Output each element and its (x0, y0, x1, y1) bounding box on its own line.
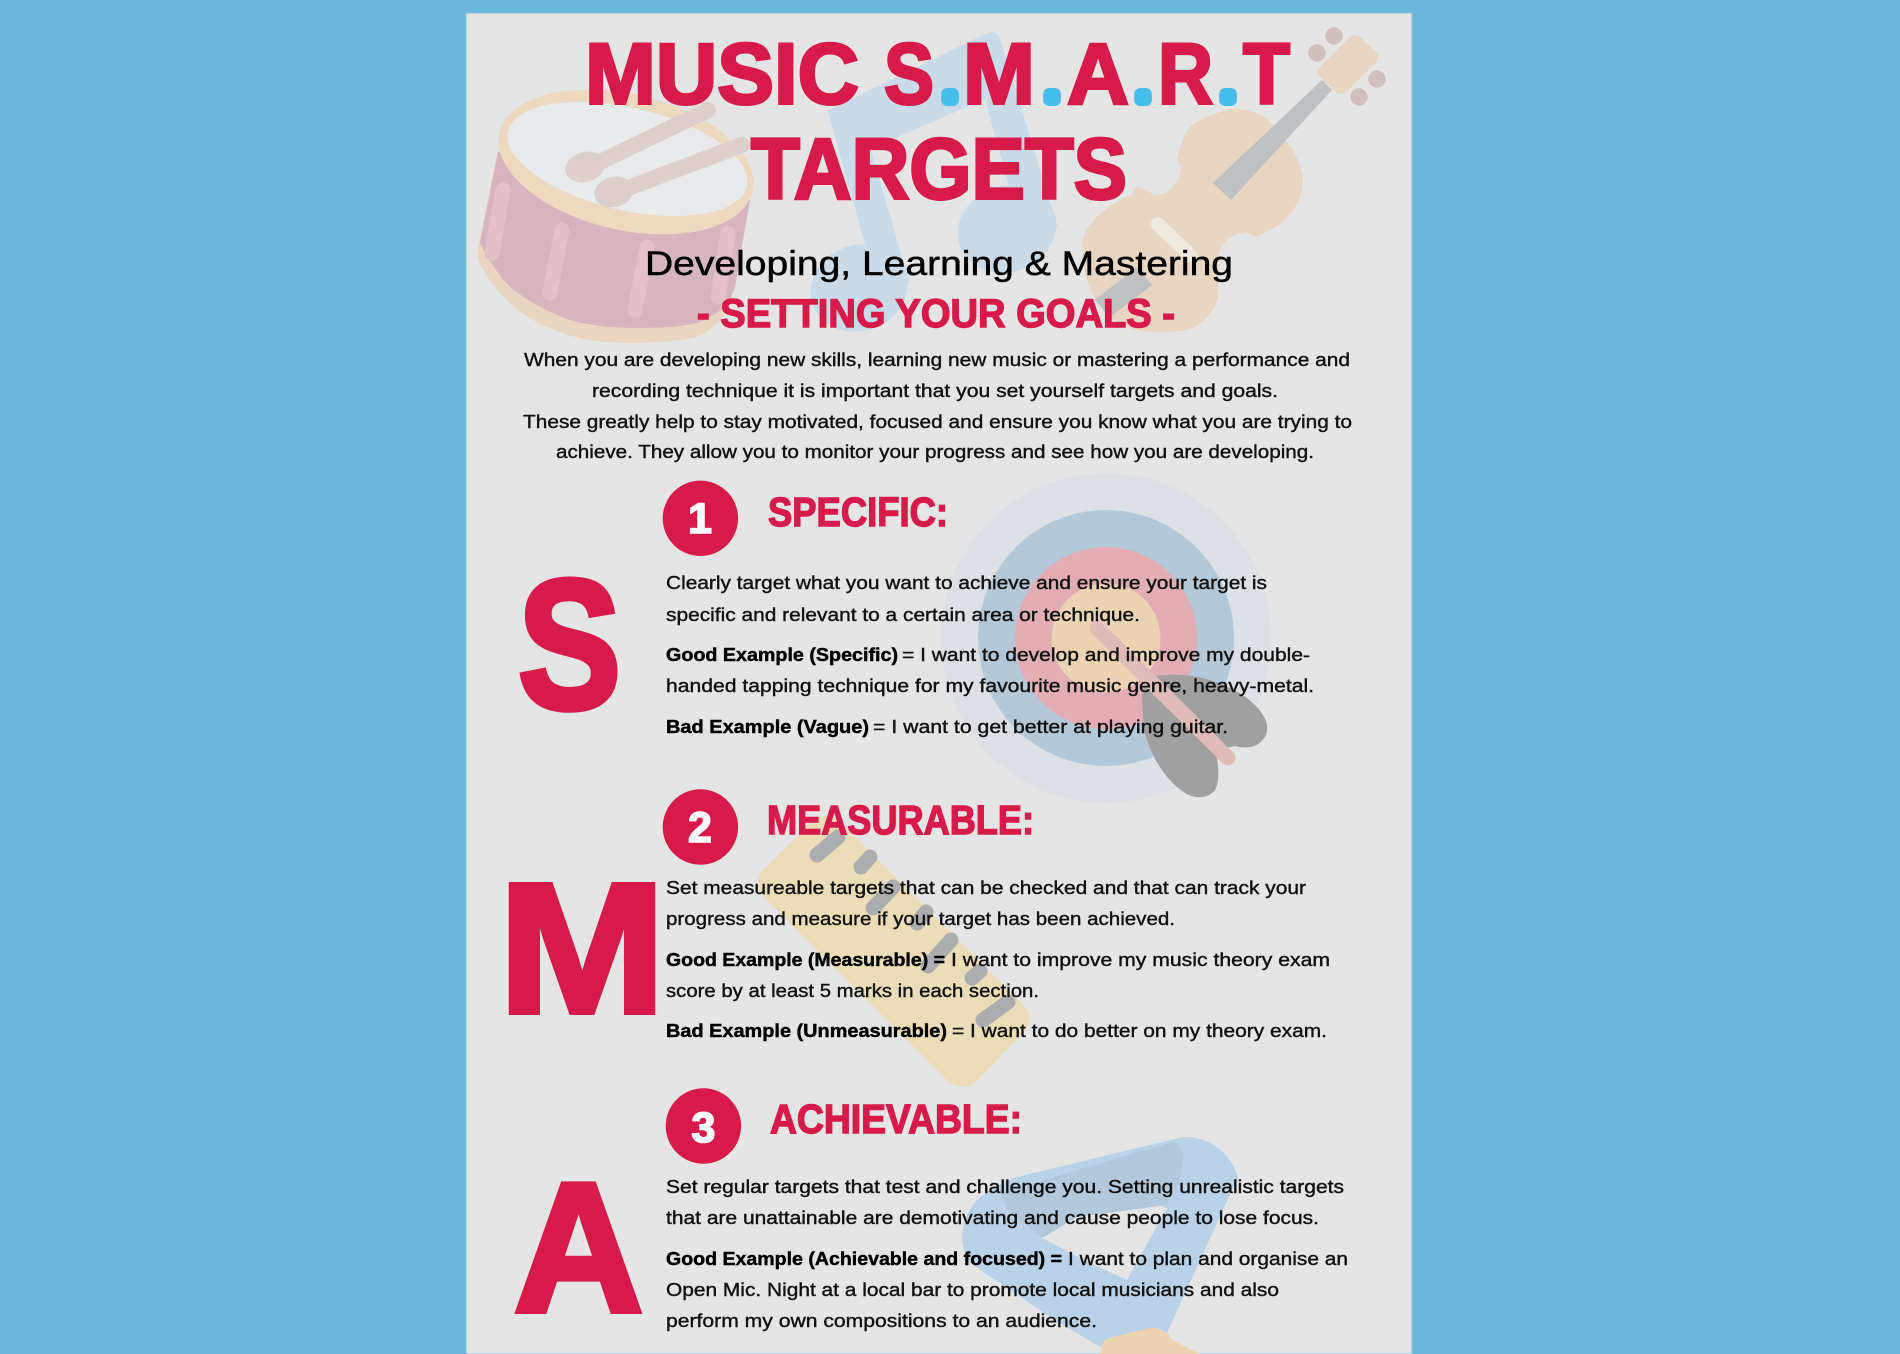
badge 1: 1 (688, 495, 712, 543)
title line 1: A (1067, 26, 1129, 122)
heading: measurable: MEASURABLE: (767, 797, 1034, 843)
icon: target with dart (941, 473, 1271, 803)
body text: = I want to develop and improve my double- (902, 644, 1310, 665)
body text: handed tapping technique for my favourite music genre, heavy-metal. (666, 675, 1314, 696)
intro paragraph: recording technique it is important that you set yourself targets and goals. (592, 380, 1278, 401)
body text: Bad Example (Unmeasurable) (666, 1020, 947, 1041)
body text: progress and measure if your target has been achieved. (666, 908, 1175, 929)
body text: specific and relevant to a certain area or technique. (666, 604, 1140, 625)
title line 1: M (963, 26, 1035, 122)
body text: Good Example (Achievable and focused) = (666, 1248, 1062, 1269)
body text: that are unattainable are demotivating and cause people to lose focus. (666, 1207, 1319, 1228)
badge 3: 3 (691, 1104, 715, 1152)
badge 2 (663, 789, 738, 865)
body text: Bad Example (Vague) (666, 716, 869, 737)
title line 1: . (1222, 65, 1234, 109)
body text: = I want to get better at playing guitar. (873, 716, 1228, 737)
body text (666, 572, 1314, 737)
subtitle: Developing, Learning & Mastering (645, 245, 1233, 283)
body text: Clearly target what you want to achieve and ensure your target is (666, 572, 1267, 593)
body text: perform my own compositions to an audience. (666, 1310, 1097, 1331)
badge 3 (666, 1088, 741, 1164)
title line 1: R (1158, 26, 1213, 122)
title line 1 (585, 26, 1290, 122)
title line 1: . (1138, 65, 1149, 109)
title (585, 26, 1290, 218)
body text: Good Example (Measurable) = (666, 949, 945, 970)
body text: Set measureable targets that can be checked and that can track your (666, 877, 1306, 898)
badge 1 (663, 481, 738, 556)
body text (666, 877, 1330, 1041)
intro paragraph: These greatly help to stay motivated, focused and ensure you know what you are trying to (523, 411, 1352, 432)
title line 1: T (1243, 26, 1290, 122)
section: measurable (498, 789, 1330, 1052)
letter S: S (518, 541, 621, 747)
badge 2: 2 (688, 804, 712, 852)
heading: specific: SPECIFIC: (768, 489, 948, 535)
title line 2: TARGETS (751, 122, 1127, 218)
intro paragraph: achieve. They allow you to monitor your progress and see how you are developing. (556, 441, 1314, 462)
title line 1: . (944, 65, 956, 109)
body text: I want to plan and organise an (1068, 1248, 1348, 1269)
body text: score by at least 5 marks in each section. (666, 980, 1039, 1001)
icon: ruler (778, 836, 1009, 1067)
section: specific (518, 481, 1314, 747)
intro paragraph: When you are developing new skills, learning new music or mastering a performance and (524, 349, 1350, 370)
title line 1: . (1046, 65, 1058, 109)
letter M: M (498, 846, 666, 1052)
icon: drum (478, 66, 768, 343)
body text: I want to improve my music theory exam (951, 949, 1330, 970)
body text: Open Mic. Night at a local bar to promote local musicians and also (666, 1279, 1279, 1300)
letter A: A (514, 1144, 643, 1350)
body text: Set regular targets that test and challenge you. Setting unrealistic targets (666, 1176, 1344, 1197)
panel: card (466, 13, 1412, 1354)
body text (666, 1176, 1348, 1331)
section: achievable (514, 1088, 1348, 1350)
body text: Good Example (Specific) (666, 644, 898, 665)
icon: violin (1082, 27, 1386, 332)
icon: triangle instrument with hand (962, 1137, 1238, 1354)
body text: = I want to do better on my theory exam. (952, 1020, 1327, 1041)
title line 1: MUSIC (585, 26, 859, 122)
icon: music notes (798, 35, 1069, 345)
subheading: setting your goals: - SETTING YOUR GOALS - (697, 292, 1175, 336)
title line 1: S (884, 26, 934, 122)
intro paragraph (523, 349, 1352, 462)
heading: achievable: ACHIEVABLE: (770, 1096, 1022, 1142)
